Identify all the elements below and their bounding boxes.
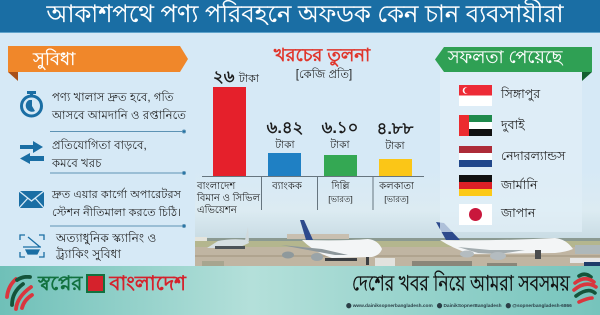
value: Kolkata: টাকা (385, 140, 405, 152)
label: Delhi: [ভারত] (328, 194, 353, 204)
value: Kolkata: ৪.৮৮ (377, 120, 413, 138)
icon: stopwatch (20, 91, 43, 118)
label: Kolkata: [ভারত] (384, 194, 409, 204)
text: letter to operators: স্টেশন নীতিমালা করতে চিঠি। (52, 207, 181, 219)
text: letter to operators (52, 188, 182, 219)
slogan: দেশের খবর নিয়ে আমরা সবসময় (352, 272, 570, 296)
text: letter to operators: দ্রুত এয়ার কার্গো অপারেটরস (52, 189, 181, 201)
country: Dubai: দুবাই (501, 118, 525, 132)
label: Bangkok: ব্যাংকক (272, 181, 302, 192)
text: faster clearance (52, 90, 186, 122)
title: আকাশপথে পণ্য পরিবহনে অফডক কেন চান ব্যবসায়ীরা (46, 1, 564, 28)
label: Delhi (328, 180, 353, 204)
header bar (0, 0, 600, 33)
label: Kolkata (379, 181, 414, 204)
text: competition: প্রতিযোগিতা বাড়বে, (52, 139, 147, 152)
text: competition: কমবে খরচ (52, 157, 102, 170)
heading: success: সফলতা পেয়েছে (448, 47, 562, 67)
chart heading: খরচের তুলনা (274, 45, 370, 65)
plane left small (207, 227, 249, 249)
country: Netherlands: নেদারল্যান্ডস (501, 149, 565, 163)
bar: Delhi (324, 155, 357, 176)
label: Bangladesh (196, 181, 260, 216)
chart subheading: [কেজি প্রতি] (296, 69, 352, 81)
label: Delhi: দিল্লি (331, 181, 350, 192)
value: Bangladesh: ২৬ টাকা (213, 68, 259, 86)
value: Delhi: টাকা (330, 138, 350, 150)
country: Germany: জার্মানি (501, 178, 537, 192)
text: faster clearance: পণ্য খালাস দ্রুত হবে, গতি (52, 91, 174, 104)
airport ground (195, 234, 600, 268)
label: Bangladesh: এভিয়েশন (197, 205, 237, 216)
flag: UAE (459, 115, 492, 136)
logo: brand name: স্বপ্নের বাংলাদেশ (38, 273, 186, 295)
value: Bangkok (266, 119, 303, 150)
ribbon: success (435, 47, 592, 81)
logo: globe left (5, 275, 34, 311)
cargo (202, 258, 517, 267)
flag: Singapore (459, 85, 492, 106)
text: faster clearance: আসবে আমদানি ও রপ্তানিতে (52, 109, 186, 122)
icon: exchange arrows (20, 141, 44, 164)
icon: envelope (19, 191, 44, 208)
text: scanning: ট্র্যাকিং সুবিধা (56, 247, 121, 261)
label: Bangladesh: বিমান ও সিভিল (197, 193, 260, 204)
text: scanning (56, 231, 156, 261)
dividers (50, 130, 186, 228)
label: Bangladesh: বাংলাদেশ (197, 181, 235, 192)
value: Bangkok: টাকা (275, 138, 295, 150)
footer band (0, 266, 600, 315)
heading: benefits: সুবিধা (33, 49, 75, 69)
ribbon: benefits (8, 46, 188, 81)
value: Kolkata (377, 120, 414, 152)
icon: scanner (19, 234, 45, 258)
flag: Germany (459, 175, 492, 196)
bar: Bangkok (268, 153, 301, 176)
value: Bangkok: ৬.৪২ (267, 119, 303, 137)
text: competition (52, 138, 147, 170)
bar: Bangladesh (213, 87, 246, 176)
plane centre (281, 220, 382, 265)
label: Kolkata: কলকাতা (379, 181, 414, 192)
plane right (436, 222, 600, 267)
flag: Japan (459, 204, 492, 225)
value: Delhi (322, 119, 358, 150)
bar: Kolkata (379, 159, 412, 176)
contact line: ⬤ www.dainiksopnerbangladesh.com ⬤ DainikSopnerBangladesh ⬤ @sopnerbangladesh-6866 (346, 304, 572, 309)
value: Delhi: ৬.১০ (322, 119, 358, 137)
flag: Netherlands (459, 146, 492, 167)
country: Japan: জাপান (501, 206, 535, 220)
bar chart (202, 87, 424, 210)
text: scanning: অত্যাধুনিক স্ক্যানিং ও (56, 231, 156, 245)
logo: globe right (572, 272, 598, 304)
panel: successful countries (440, 60, 582, 232)
country: Singapore: সিঙ্গাপুর (501, 87, 540, 101)
